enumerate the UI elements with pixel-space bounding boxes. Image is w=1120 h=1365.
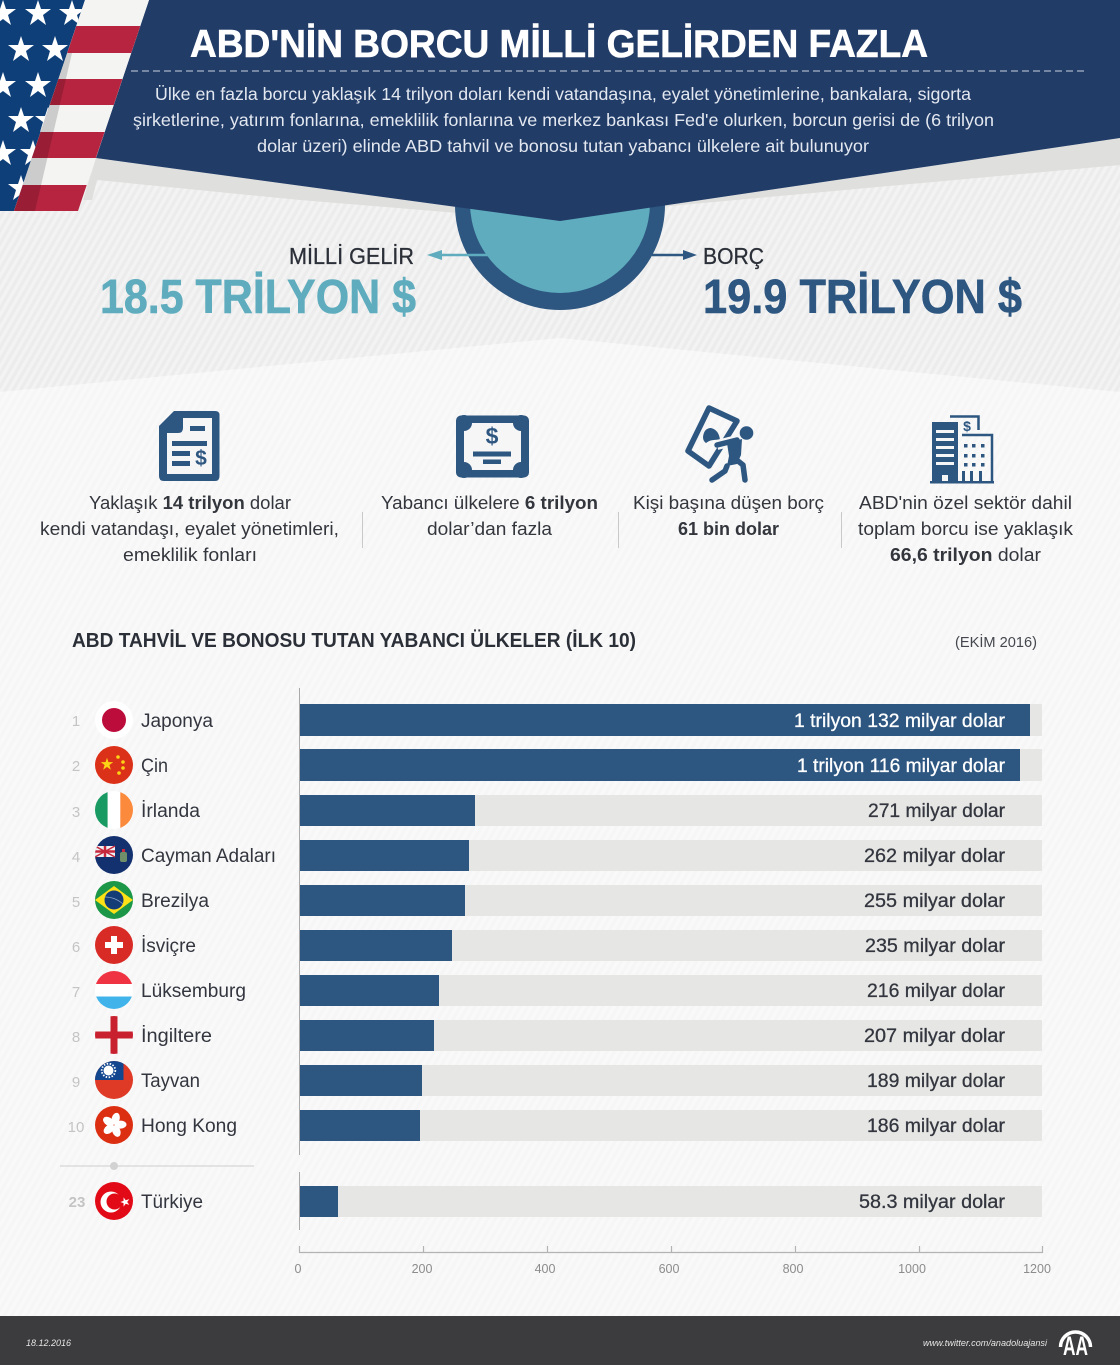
rank numbers: 3 xyxy=(72,804,80,821)
country names: Brezilya xyxy=(141,891,209,912)
bar tracks xyxy=(300,704,1042,1217)
text: total debt: 66,6 trilyon dolar xyxy=(890,545,1041,565)
rank numbers: 4 xyxy=(72,849,80,866)
rank numbers: 8 xyxy=(72,1029,80,1046)
icon: flag China xyxy=(95,746,133,784)
footer date: 18.12.2016 xyxy=(26,1338,71,1348)
text: 14 trillion xyxy=(40,493,339,565)
country names: Türkiye xyxy=(141,1192,203,1213)
icon: office buildings xyxy=(930,416,994,484)
icon: flag Cayman Islands xyxy=(95,836,133,874)
country names: Tayvan xyxy=(141,1071,200,1092)
intro text xyxy=(133,84,994,156)
bar labels: 58.3 milyar dolar xyxy=(859,1192,1006,1213)
arrow: debt xyxy=(652,250,697,260)
bar labels: 255 milyar dolar xyxy=(864,891,1006,912)
icon: bond certificate xyxy=(456,415,529,478)
text: 6 trillion: dolar’dan fazla xyxy=(427,519,553,539)
rank numbers: 6 xyxy=(72,939,80,956)
rank numbers xyxy=(68,713,85,1211)
AA logo: AA xyxy=(1063,1331,1088,1361)
rank numbers: 9 xyxy=(72,1074,80,1091)
icon: flag Turkey xyxy=(95,1182,133,1220)
chart axis xyxy=(295,1246,1051,1276)
text: 14 trillion: Yaklaşık 14 trilyon dolar xyxy=(89,493,291,513)
bar labels: 207 milyar dolar xyxy=(864,1026,1006,1047)
icon: flag Taiwan xyxy=(95,1061,133,1099)
header banner xyxy=(96,0,1120,221)
country names: Cayman Adaları xyxy=(141,846,276,867)
bar labels: 271 milyar dolar xyxy=(868,801,1006,822)
text: total debt: ABD'nin özel sektör dahil xyxy=(859,493,1072,513)
icon: flag England xyxy=(95,1016,133,1054)
footer xyxy=(0,1316,1120,1365)
icon: flag Switzerland xyxy=(95,926,133,964)
chart axis: 0 xyxy=(295,1262,302,1276)
text: per capita debt: 61 bin dolar xyxy=(678,519,779,539)
intro text: şirketlerine, yatırım fonlarına, emeklilik fonlarına ve merkez bankası Fed'e olurken, borcun gerisi de (6 trilyon xyxy=(133,110,994,130)
rank numbers: 7 xyxy=(72,984,80,1001)
text: 6 trillion: Yabancı ülkelere 6 trilyon xyxy=(381,493,598,513)
bar labels: 1 trilyon 116 milyar dolar xyxy=(797,756,1006,777)
text: 14 trillion: emeklilik fonları xyxy=(123,545,257,565)
chart heading: ABD TAHVİL VE BONOSU TUTAN YABANCI ÜLKELER (İLK 10) xyxy=(72,629,636,652)
separator xyxy=(60,1162,254,1170)
stat: national income xyxy=(100,243,416,324)
bar values xyxy=(300,704,1030,1217)
intro text: dolar üzeri) elinde ABD tahvil ve bonosu tutan yabancı ülkelere ait bulunuyor xyxy=(257,136,869,156)
icon: document: $ xyxy=(195,447,207,470)
country names: Japonya xyxy=(141,711,213,732)
footer link: www.twitter.com/anadoluajansi xyxy=(923,1338,1048,1348)
rank numbers: 1 xyxy=(72,713,80,730)
header shadow xyxy=(83,138,1120,221)
bar labels: 216 milyar dolar xyxy=(867,981,1006,1002)
country names xyxy=(141,711,276,1213)
text: total debt xyxy=(858,493,1074,565)
country names: Lüksemburg xyxy=(141,981,246,1002)
debt circle xyxy=(455,100,665,310)
chart date: (EKİM 2016) xyxy=(955,633,1037,651)
country names: İngiltere xyxy=(141,1026,212,1047)
icon: office buildings: $ xyxy=(963,418,971,434)
rank numbers: 5 xyxy=(72,894,80,911)
text: per capita debt: Kişi başına düşen borç xyxy=(633,493,824,513)
text: 6 trillion xyxy=(381,493,598,539)
bar labels: 235 milyar dolar xyxy=(865,936,1006,957)
rank numbers: 2 xyxy=(72,758,80,775)
AA logo xyxy=(1060,1331,1090,1361)
chart axis: 400 xyxy=(535,1262,555,1276)
stat: national income: 18.5 TRİLYON $ xyxy=(100,271,416,324)
bar chart xyxy=(300,688,1042,1230)
bar labels: 262 milyar dolar xyxy=(864,846,1006,867)
text: per capita debt xyxy=(633,493,824,539)
icon: person carrying money xyxy=(688,408,753,480)
icon: flag Hong Kong xyxy=(95,1106,133,1144)
bar labels: 189 milyar dolar xyxy=(867,1071,1006,1092)
chart axis: 200 xyxy=(412,1262,432,1276)
country names: İsviçre xyxy=(141,936,196,957)
chart axis: 600 xyxy=(659,1262,679,1276)
icon: flag Ireland xyxy=(95,791,133,829)
outer circle: debt xyxy=(455,100,665,310)
bar labels xyxy=(794,711,1006,1213)
icon: bond certificate: $ xyxy=(486,423,499,449)
bar labels: 186 milyar dolar xyxy=(867,1116,1006,1137)
icon: document xyxy=(159,411,220,481)
icon: flag Luxembourg xyxy=(95,971,133,1010)
chart axis: 800 xyxy=(783,1262,803,1276)
chart axis: 1000 xyxy=(898,1262,926,1276)
country names: İrlanda xyxy=(141,801,200,822)
inner circle: national income xyxy=(470,113,650,293)
stat: debt: 19.9 TRİLYON $ xyxy=(703,271,1022,324)
chart axis: 1200 xyxy=(1023,1262,1051,1276)
bar labels: 1 trilyon 132 milyar dolar xyxy=(794,711,1006,732)
intro text: Ülke en fazla borcu yaklaşık 14 trilyon doları kendi vatandaşına, eyalet yönetimlerine, bankalara, sigorta xyxy=(155,84,971,104)
rank numbers: 10 xyxy=(68,1119,84,1136)
arrow: income xyxy=(427,250,490,260)
text: total debt: toplam borcu ise yaklaşık xyxy=(858,519,1074,539)
stat: debt xyxy=(703,243,1022,324)
country names: Çin xyxy=(141,756,168,777)
text: 14 trillion: kendi vatandaşı, eyalet yönetimleri, xyxy=(40,519,339,539)
title: ABD'NİN BORCU MİLLİ GELİRDEN FAZLA xyxy=(190,23,928,66)
icon: US flag xyxy=(0,0,149,211)
country names: Hong Kong xyxy=(141,1116,237,1137)
rank numbers: 23 xyxy=(69,1194,85,1211)
stat: national income: MİLLİ GELİR xyxy=(289,243,414,269)
icon: flag Brazil xyxy=(95,881,133,919)
stat: debt: BORÇ xyxy=(703,243,764,269)
icon: flag Japan xyxy=(95,701,133,739)
